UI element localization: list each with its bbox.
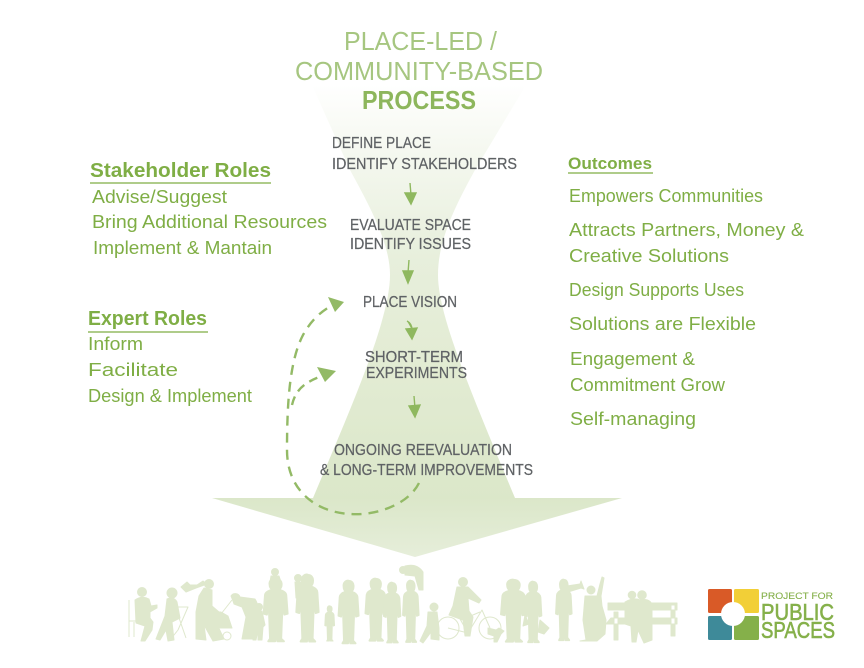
panel: stakeholder roles [90, 160, 327, 258]
arrow: vision to experiments [406, 321, 417, 339]
panel: outcomes [568, 154, 804, 429]
step: ongoing reevaluation: ONGOING REEVALUATION [334, 442, 512, 459]
cyclist [437, 578, 501, 639]
seated woman [156, 588, 188, 641]
man lifting child [400, 565, 423, 642]
trumpet player [556, 580, 584, 640]
running child [420, 603, 439, 643]
dashed feedback arrow to place vision [287, 297, 419, 514]
panel: outcomes: Outcomes [568, 154, 652, 173]
step: define place: IDENTIFY STAKEHOLDERS [332, 156, 517, 173]
step: evaluate space [350, 217, 471, 253]
dashed feedback arrow to experiments [292, 367, 336, 405]
man with child on shoulders [264, 568, 288, 641]
panel: expert roles: Design & Implement [88, 386, 252, 406]
small child [253, 604, 265, 640]
hourglass funnel background [312, 85, 526, 498]
step: ongoing reevaluation: & LONG-TERM IMPROVEMENTS [320, 462, 533, 479]
panel: outcomes: Engagement & [570, 349, 695, 369]
panel: expert roles: Facilitate [88, 360, 178, 380]
woman walking [338, 581, 359, 643]
walking woman [523, 582, 549, 642]
bench with couple [606, 591, 677, 643]
panel: outcomes: Attracts Partners, Money & [569, 220, 804, 240]
title: PLACE-LED / [344, 26, 498, 56]
step: short-term experiments [365, 349, 467, 382]
arrow: experiments to reevaluation [409, 396, 420, 417]
double bass player [580, 577, 606, 641]
dog [488, 628, 504, 642]
step: short-term experiments: EXPERIMENTS [366, 365, 467, 382]
panel: outcomes: Solutions are Flexible [569, 314, 756, 334]
seated man on chair [129, 588, 157, 641]
panel: stakeholder roles: Stakeholder Roles [90, 160, 271, 182]
standing man [365, 579, 386, 641]
arrow: define to evaluate [405, 183, 416, 204]
walking man [501, 580, 526, 642]
stroller [213, 600, 232, 640]
title: COMMUNITY-BASED [295, 56, 543, 86]
woman holding child [294, 574, 319, 642]
step: define place: DEFINE PLACE [332, 135, 431, 152]
logo: project for public spaces [708, 589, 835, 643]
panel: outcomes: Commitment Grow [570, 375, 726, 395]
step: short-term experiments: SHORT-TERM [365, 349, 463, 366]
saxophone player [181, 580, 224, 641]
panel: stakeholder roles: Implement & Mantain [93, 238, 272, 258]
panel: expert roles [88, 308, 252, 406]
panel: stakeholder roles: Bring Additional Resources [92, 212, 327, 232]
logo wordmark: SPACES [761, 617, 835, 643]
step: evaluate space: EVALUATE SPACE [350, 217, 471, 234]
standing woman [384, 583, 401, 642]
logo wordmark: PUBLIC [761, 599, 834, 625]
step: define place [332, 135, 517, 173]
logo wordmark: PROJECT FOR [761, 591, 833, 602]
panel: outcomes: Design Supports Uses [569, 280, 744, 300]
logo icon [708, 589, 759, 640]
man leaning over stroller [231, 594, 258, 639]
step: evaluate space: IDENTIFY ISSUES [350, 236, 471, 253]
panel: expert roles: Inform [88, 334, 143, 354]
title [295, 26, 543, 115]
panel: outcomes: Creative Solutions [569, 246, 729, 266]
step: place vision: PLACE VISION [363, 294, 457, 311]
panel: stakeholder roles: Advise/Suggest [92, 187, 227, 207]
large down arrow [212, 498, 622, 557]
logo wordmark [761, 591, 835, 643]
arrow: evaluate to vision [403, 260, 413, 283]
panel: outcomes: Self-managing [570, 409, 696, 429]
step: ongoing reevaluation [320, 442, 533, 479]
child holding hand [325, 606, 335, 641]
silhouettes of people [129, 565, 677, 643]
panel: expert roles: Expert Roles [88, 308, 207, 330]
panel: outcomes: Empowers Communities [569, 186, 763, 206]
title: PROCESS [362, 85, 476, 115]
